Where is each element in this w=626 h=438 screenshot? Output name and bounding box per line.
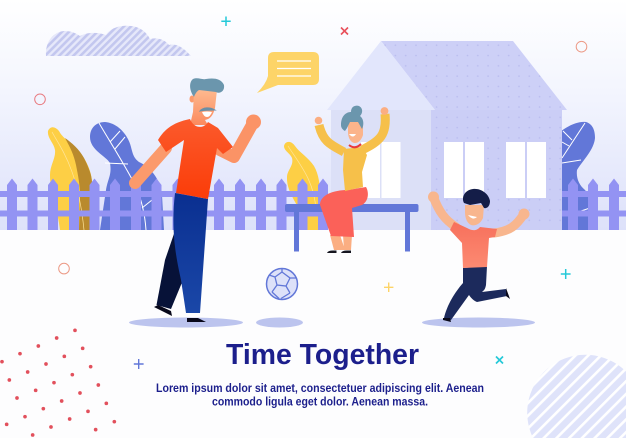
picket fence right [562,178,626,230]
house right wall [431,110,562,230]
yellow leaf middle [284,142,320,230]
man shirt [158,119,233,199]
boy hands [428,192,530,220]
yellow leaf left [48,127,92,230]
boy left arm [433,196,456,227]
boy shoes [443,288,510,322]
icon: cyan plus [221,16,231,26]
man right arm [220,123,253,157]
boy figure [428,189,530,322]
ground shadows [129,318,535,328]
woman hair [341,106,363,131]
house left wall [331,110,431,230]
man shoes [154,305,206,322]
icon: red cross [341,28,348,34]
woman figure [315,106,388,253]
boy smile [468,215,477,219]
woman left arm [319,125,344,152]
man left arm [135,148,166,183]
icon: red ring left [35,94,45,105]
woman skirt [320,187,368,237]
woman neck and necklace [349,144,361,147]
house windows [361,142,546,198]
bench [285,204,418,252]
man figure [135,78,261,322]
blue leaf right [560,122,595,230]
house [327,41,567,230]
boy right arm [494,214,524,233]
woman smile [349,134,356,136]
striped circle [527,355,626,438]
man smile [202,112,212,117]
picket fence left [0,178,328,230]
woman hands [315,107,388,124]
woman face [348,122,363,143]
title: Time Together [226,339,419,371]
icon: yellow plus [384,282,393,292]
red dot field [0,328,116,437]
man back leg [156,225,183,309]
ball [266,268,298,300]
boy hair [463,189,490,208]
man neck and face [190,90,217,125]
boy trousers [444,266,507,320]
woman shoes [327,250,351,253]
man hand [246,114,261,130]
house dot texture [381,41,567,230]
blue leaf left [90,122,164,230]
man front leg [173,193,208,313]
icon: salmon ring lower left [59,263,69,274]
house right roof [381,41,567,110]
woman legs [330,235,352,250]
icon: salmon ring right [576,41,587,52]
woman blouse [343,147,367,191]
man hair [190,78,224,97]
boy shirt [450,222,497,268]
body text: Lorem ipsum dolor sit amet, consectetuer adipiscing elit. Aenean [156,383,484,395]
woman right arm [362,114,385,150]
boy face [465,205,484,225]
icon: cyan cross [496,356,503,364]
body text [156,383,484,408]
icon: blue plus [134,359,144,369]
icon: cyan plus right [561,269,571,279]
man ear [190,96,194,102]
body text: commodo ligula eget dolor. Aenean massa. [212,396,428,408]
cloud [46,26,191,56]
speech bubble [257,52,319,93]
man moustache [200,108,215,111]
house gable [327,41,435,110]
